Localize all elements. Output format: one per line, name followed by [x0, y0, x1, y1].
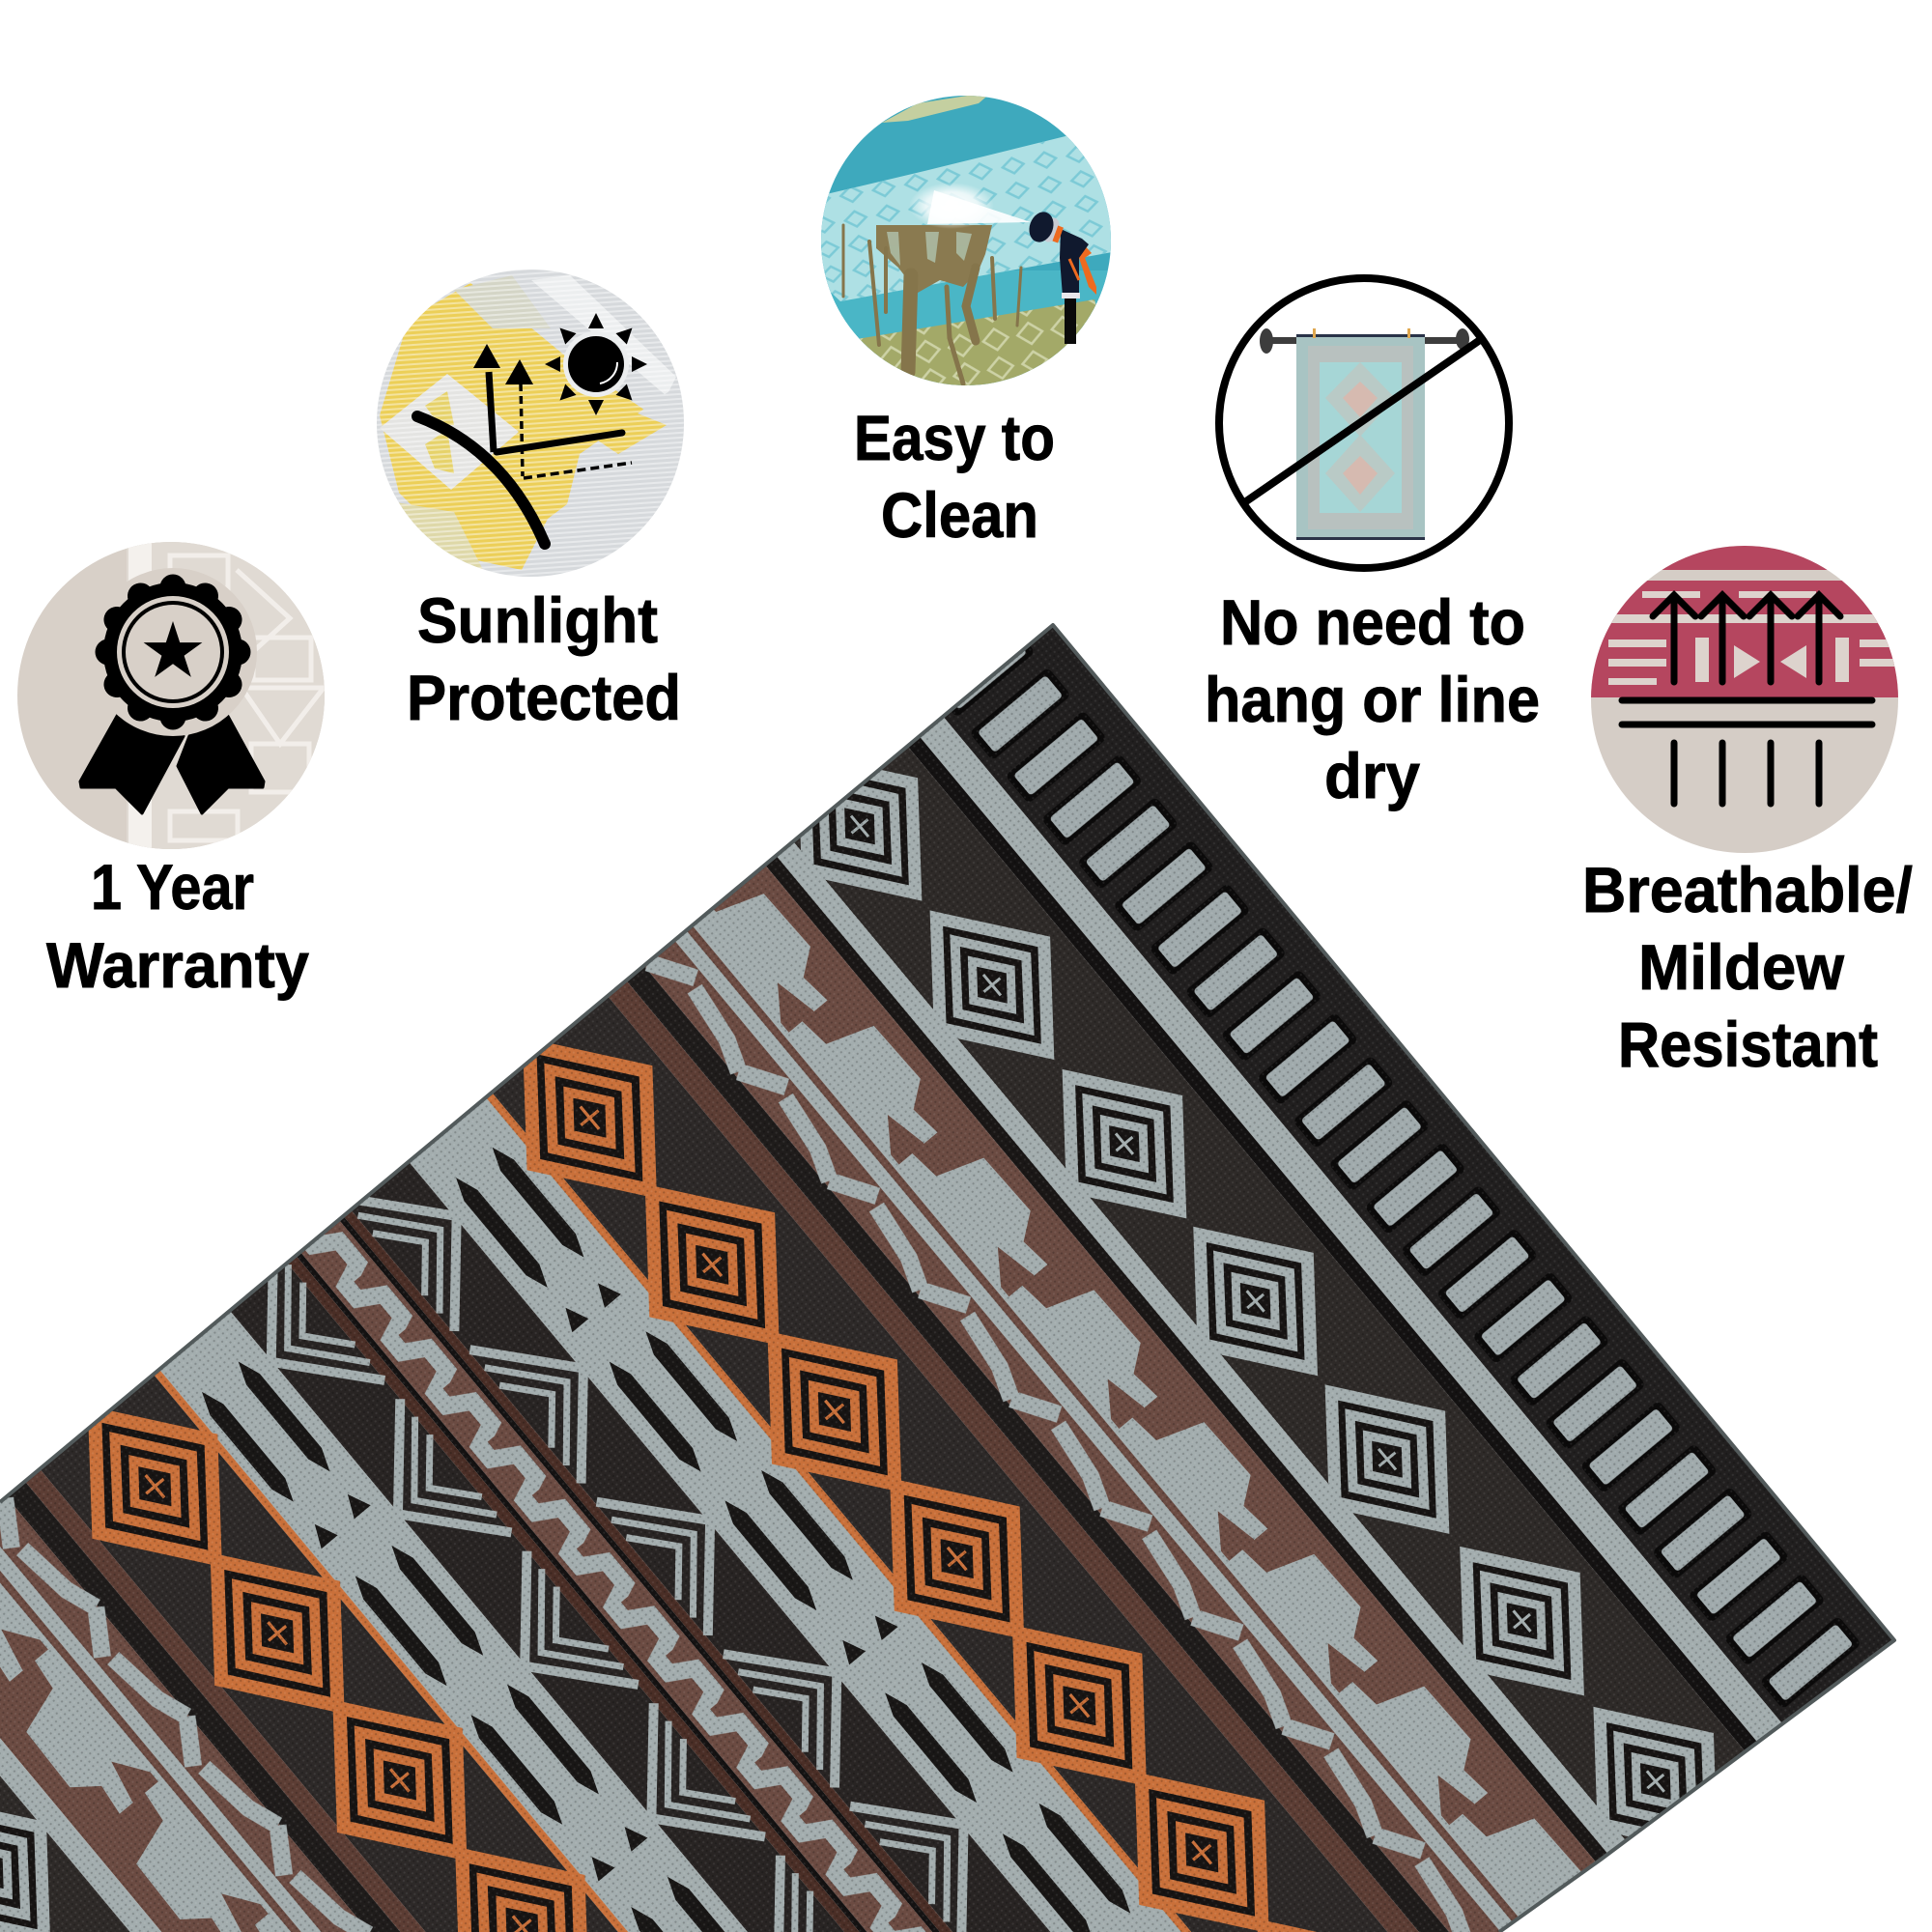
- woven texture: [0, 614, 1932, 1932]
- icon: airflow arrows: [1622, 595, 1872, 804]
- label: No need to hang or line dry: hang or line: [1205, 664, 1540, 735]
- icon: warranty circle: [17, 536, 329, 855]
- label: 1 Year Warranty: [46, 851, 309, 1001]
- label: Sunlight Protected: [407, 584, 681, 733]
- grey diamonds row two: [0, 1812, 50, 1932]
- icon: hose nozzle: [1025, 209, 1096, 344]
- label: No need to hang or line dry: dry: [1324, 740, 1420, 811]
- label: 1 Year Warranty: Warranty: [46, 929, 309, 1001]
- rug edge binding: [0, 625, 1894, 1932]
- label: No need to hang or line dry: [1205, 586, 1540, 811]
- chevrons row two: [267, 1264, 813, 1932]
- label: Breathable / Mildew Resistant: Breathable/: [1582, 854, 1913, 925]
- ikat band one: [623, 855, 1673, 1932]
- label: 1 Year Warranty: 1 Year: [91, 851, 254, 923]
- icon: ribbon rosette: [80, 568, 264, 813]
- orange diamonds row one: [524, 1043, 1318, 1932]
- grey diamonds row: [800, 770, 1716, 1836]
- icon: easy clean circle: [821, 96, 1111, 385]
- grey dashed band one: [456, 1148, 1130, 1932]
- label: Easy to Clean: Clean: [881, 479, 1038, 551]
- label: No need to hang or line dry: No need to: [1220, 586, 1525, 658]
- ikat band two: [0, 1471, 933, 1932]
- chevrons row one: [357, 1197, 968, 1932]
- rug photo: [0, 579, 1932, 1932]
- label: Sunlight Protected: Protected: [407, 662, 681, 733]
- icon: prohibition sign: [1219, 278, 1509, 568]
- label: Breathable / Mildew Resistant: Resistant: [1618, 1009, 1878, 1080]
- border bars: [946, 625, 1900, 1731]
- icon: sun and UV arrows: [417, 313, 647, 544]
- narrow zigzag band: [305, 1232, 925, 1932]
- icon: hanging rug: [1296, 328, 1425, 540]
- label: Easy to Clean: Easy to: [854, 402, 1055, 473]
- label: Breathable / Mildew Resistant: [1582, 854, 1913, 1080]
- stripe bands: [0, 614, 1932, 1932]
- icon: sunlight circle: [372, 266, 691, 584]
- icon: curtain rod: [1260, 328, 1469, 354]
- label: Easy to Clean: [854, 402, 1055, 551]
- icon: breathable circle: [1584, 541, 1903, 853]
- grey dashed band two: [202, 1362, 724, 1932]
- icon: no hanging: [1219, 278, 1509, 568]
- label: Breathable / Mildew Resistant: Mildew: [1638, 931, 1845, 1003]
- label: Sunlight Protected: Sunlight: [417, 584, 658, 656]
- orange diamonds row two: [89, 1410, 587, 1932]
